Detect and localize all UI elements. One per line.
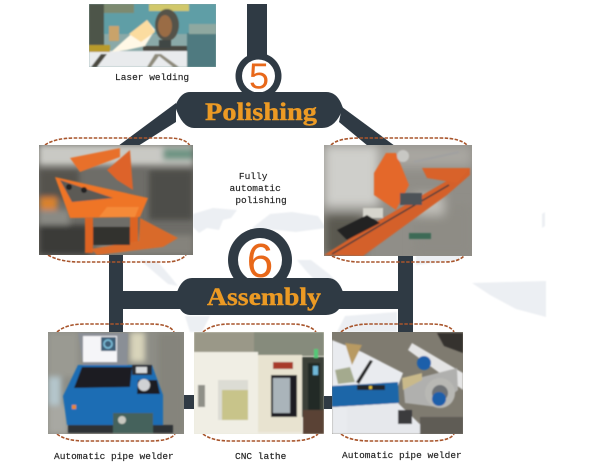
number 5: 5 — [249, 56, 269, 96]
caption: fully automatic polishing: Fully — [239, 171, 268, 182]
photo frame: CNC lathe — [194, 324, 324, 441]
assembly banner — [177, 278, 343, 315]
photo frame: left polishing machine — [39, 138, 193, 262]
caption: laser welding: Laser welding — [115, 72, 189, 83]
photo frame: right polishing machine — [324, 138, 472, 262]
top trunk — [247, 4, 267, 60]
photo: laser welding — [89, 4, 216, 67]
caption: CNC lathe: CNC lathe — [235, 451, 287, 462]
number 6: 6 — [247, 235, 273, 288]
caption: fully automatic polishing: automatic — [229, 183, 281, 194]
left vertical post — [109, 250, 123, 334]
photo frame: automatic pipe welder tool — [332, 324, 463, 441]
caption: automatic pipe welder right: Automatic pipe welder — [342, 450, 462, 461]
right vertical post — [398, 250, 413, 334]
caption: automatic pipe welder left: Automatic pipe welder — [54, 451, 174, 462]
right diagonal arm — [339, 107, 395, 146]
step 6 badge — [228, 228, 292, 292]
caption: fully automatic polishing: polishing — [235, 195, 287, 206]
heading: Polishing: Polishing — [205, 99, 318, 126]
left bottom connector — [184, 395, 195, 409]
polishing banner — [175, 92, 343, 128]
connector frame — [109, 4, 413, 409]
photo frame: automatic pipe welder console — [48, 324, 184, 441]
left diagonal arm — [118, 103, 176, 146]
assembly crossbar — [109, 291, 413, 309]
step 5 badge — [236, 53, 282, 99]
heading: Assembly: Assembly — [207, 284, 322, 311]
right bottom connector — [323, 396, 333, 409]
background world map — [140, 208, 546, 332]
